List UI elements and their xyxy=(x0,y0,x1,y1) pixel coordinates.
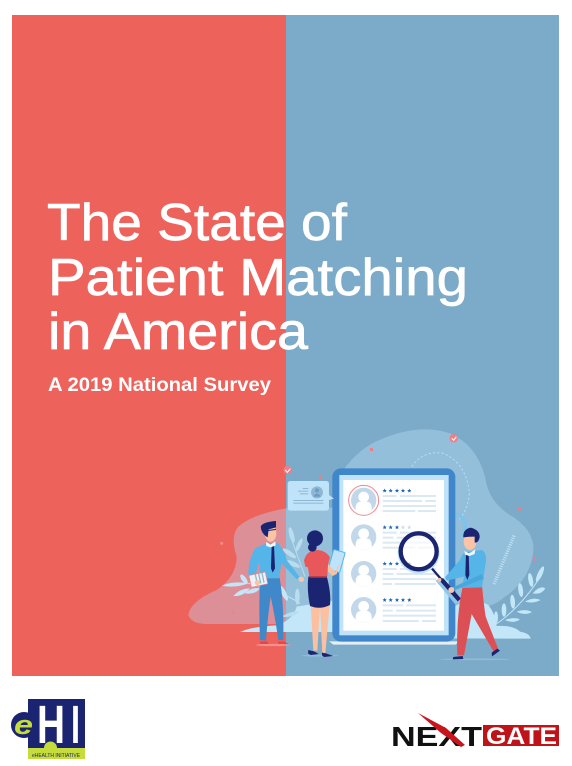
logo: NextGate: GATE xyxy=(486,723,557,750)
record row 1: highlighted patient xyxy=(349,485,436,515)
logo: eHealth Initiative: e xyxy=(14,710,33,740)
subtitle: A 2019 National Survey xyxy=(48,375,271,396)
ruler tick strip xyxy=(494,536,514,585)
right background blob xyxy=(340,429,533,607)
dashed arc decoration xyxy=(412,453,469,520)
person: man with glasses holding papers xyxy=(248,521,304,646)
logo: eHealth Initiative: eHEALTH INITIATIVE xyxy=(32,753,80,759)
gear ring behind tablet xyxy=(455,514,466,537)
floating profile card xyxy=(288,481,334,511)
person: woman with clipboard xyxy=(301,530,345,657)
magnifying glass xyxy=(399,533,459,603)
background panel: red left half xyxy=(12,15,286,676)
logo: eHealth Initiative xyxy=(11,695,85,759)
logo: eHealth Initiative: I xyxy=(71,695,80,755)
title: in America xyxy=(48,303,308,361)
illustration: people reviewing patient records xyxy=(188,429,546,660)
background panel: blue right half xyxy=(286,15,559,676)
left plant xyxy=(222,527,305,617)
logo: NextGate xyxy=(391,713,559,752)
title: The State of xyxy=(47,194,348,252)
person: man with magnifying glass xyxy=(437,528,510,660)
accent check badges and sparkles xyxy=(220,434,537,615)
tablet shadow xyxy=(329,641,460,645)
left background blob xyxy=(188,508,337,624)
logo: eHealth Initiative: H xyxy=(37,695,65,755)
patient record tablet xyxy=(332,468,455,642)
record row 4: five stars xyxy=(351,597,436,622)
title xyxy=(47,194,468,361)
record row 3 xyxy=(351,561,436,586)
title: Patient Matching xyxy=(48,249,468,307)
record row 2: three stars xyxy=(351,524,436,550)
right plant xyxy=(494,565,546,625)
logo: NextGate: NEXT xyxy=(391,721,482,752)
light cloud ground shapes xyxy=(240,600,531,639)
